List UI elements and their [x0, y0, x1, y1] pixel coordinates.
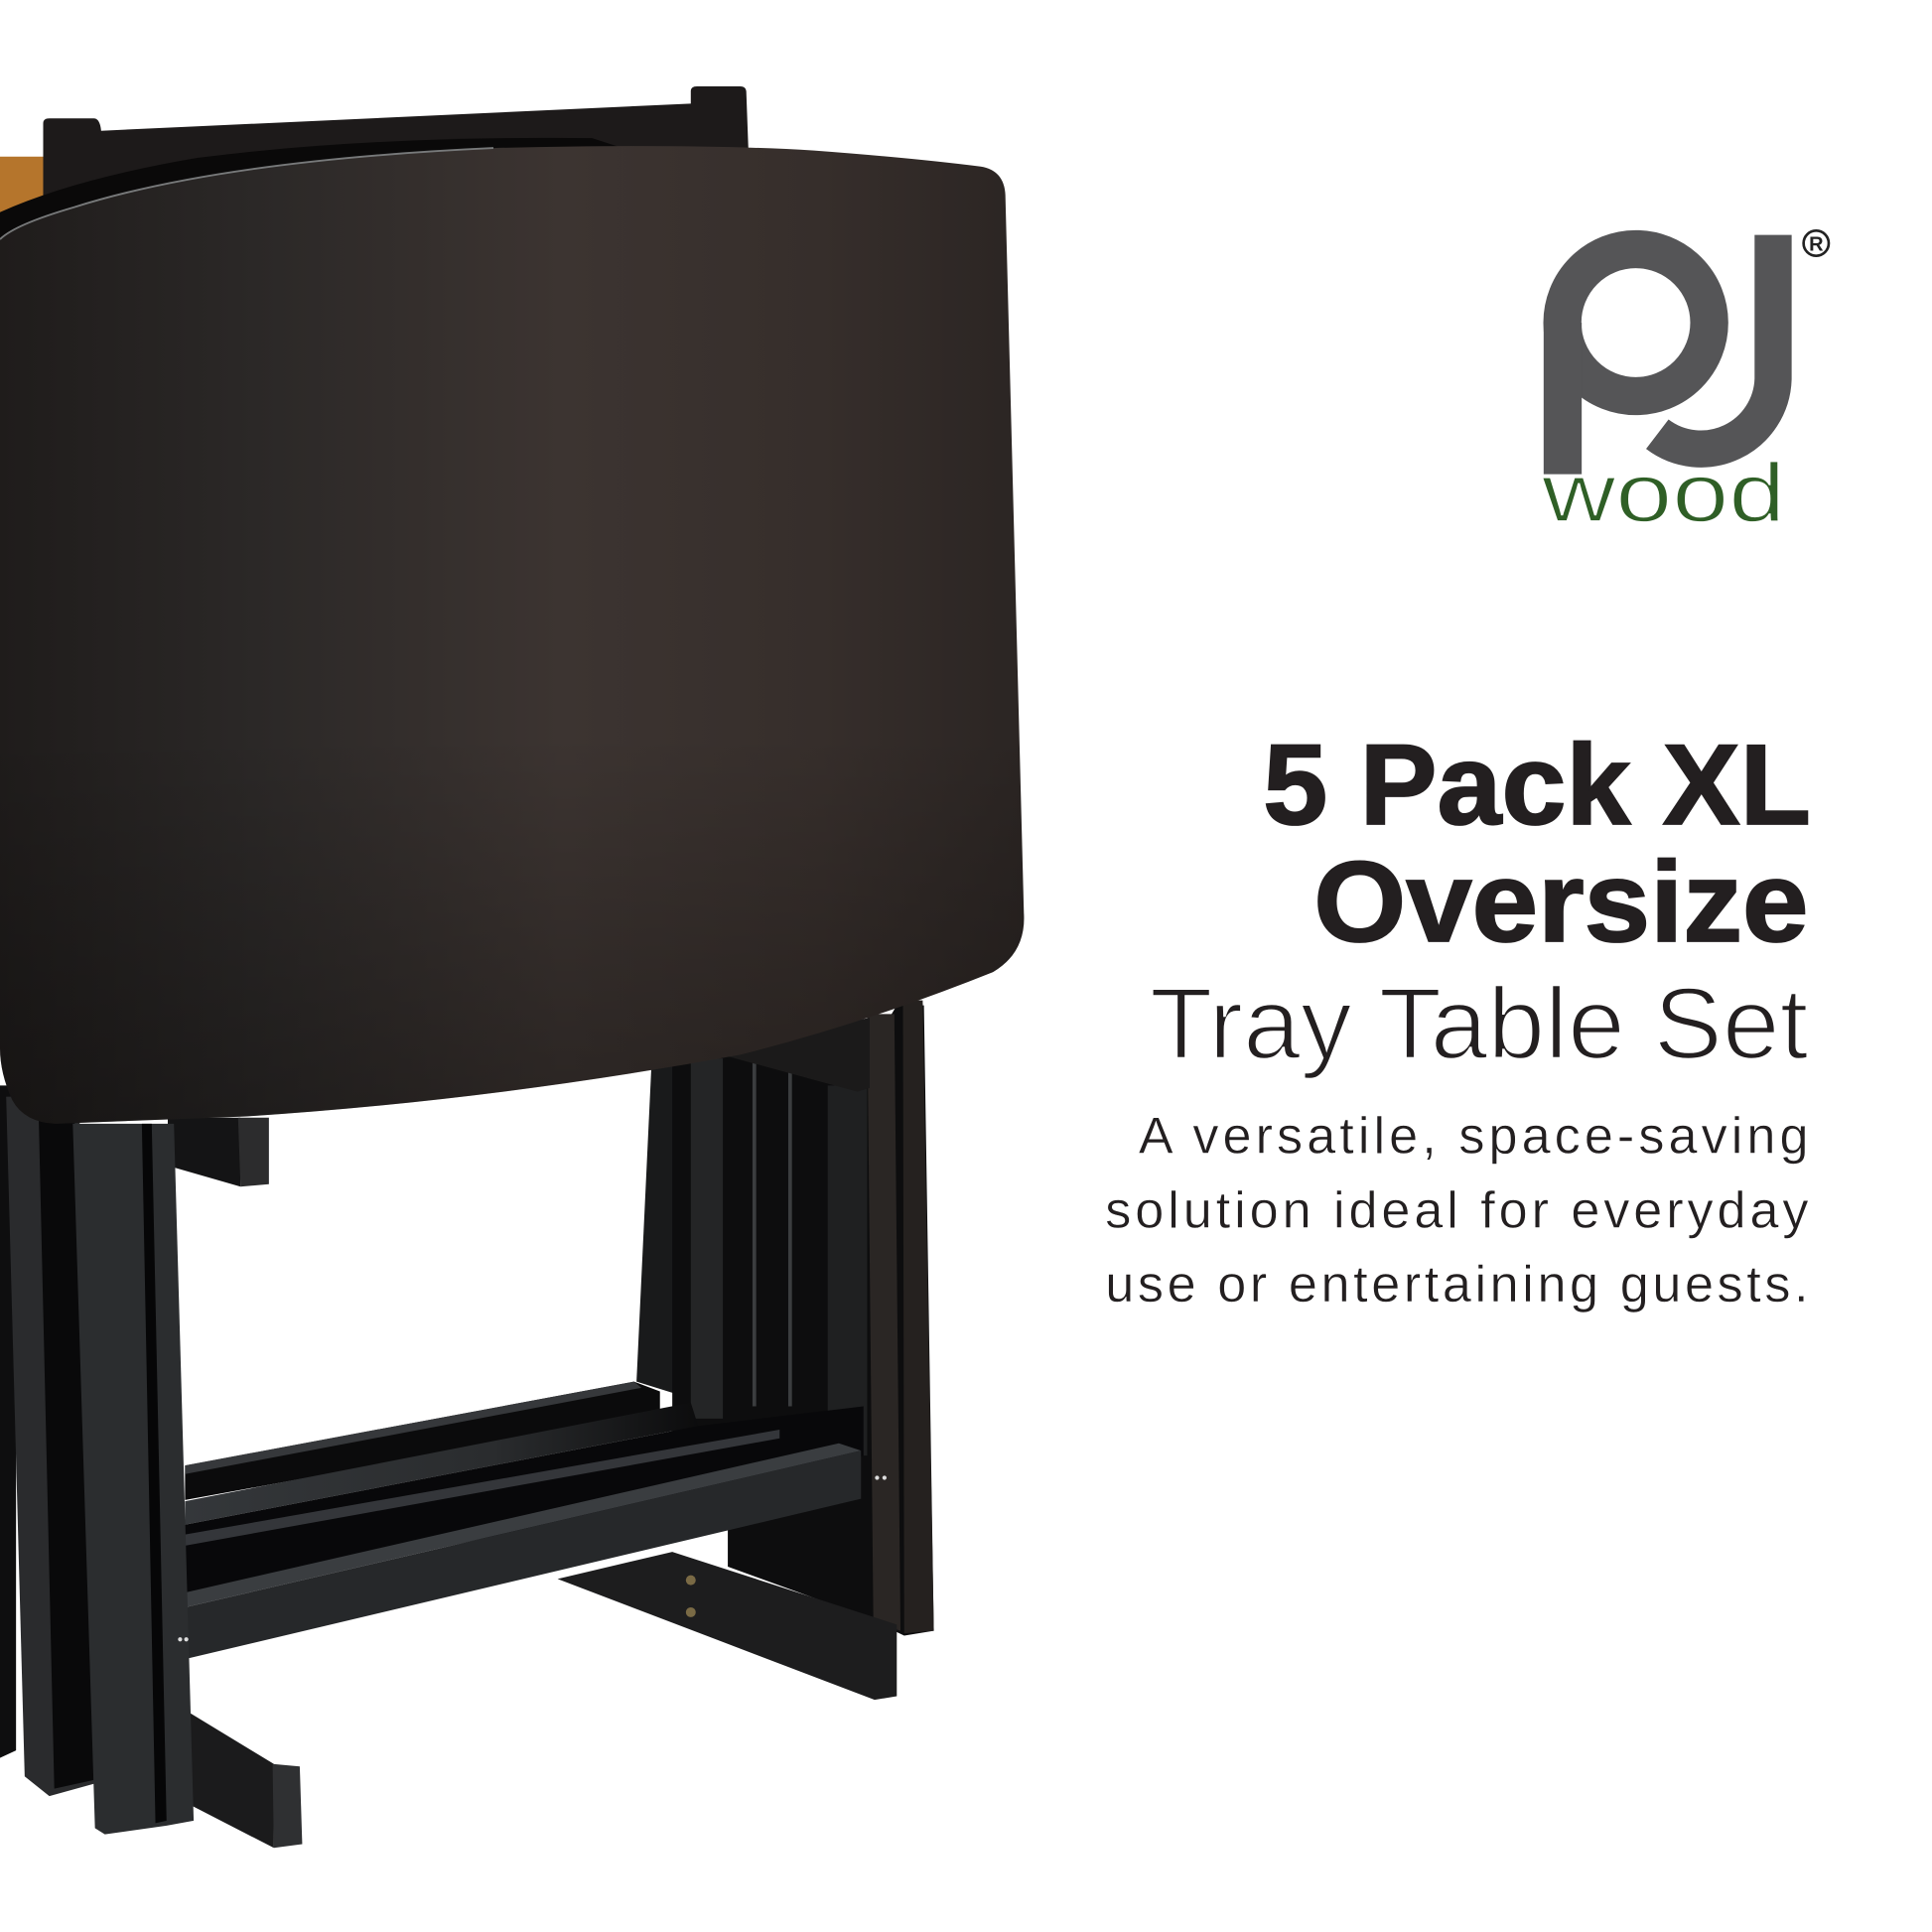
lower right foot: [558, 1552, 897, 1700]
lower left foot: [183, 1709, 302, 1848]
body text: use or entertaining guests.: [1105, 1256, 1809, 1313]
logo mark: pj: [1563, 235, 1773, 475]
registered mark: [1804, 230, 1829, 256]
body text: solution ideal for everyday: [1105, 1181, 1809, 1239]
logo wordmark: wood: wood: [1541, 447, 1785, 539]
heading: 5 Pack XL: [1263, 721, 1811, 849]
carry handle bar: [43, 86, 749, 215]
heading: [1150, 721, 1811, 1080]
body text: [1105, 1108, 1809, 1313]
heading: Tray Table Set: [1150, 967, 1809, 1080]
left leg assembly: [0, 1085, 887, 1835]
right leg assembly: [636, 1001, 934, 1636]
stretcher bars: [185, 1382, 864, 1659]
front tray top: [0, 146, 1024, 1124]
registered mark: R: [1809, 233, 1824, 255]
upper right cleat: [722, 1018, 870, 1092]
body text: A versatile, space-saving: [1139, 1108, 1809, 1166]
heading: Oversize: [1313, 838, 1809, 966]
upper left cleat: [168, 1118, 269, 1186]
second tray edge: [0, 138, 641, 247]
logo: PJ Wood: [1541, 230, 1829, 539]
oak tray behind: [0, 157, 50, 232]
